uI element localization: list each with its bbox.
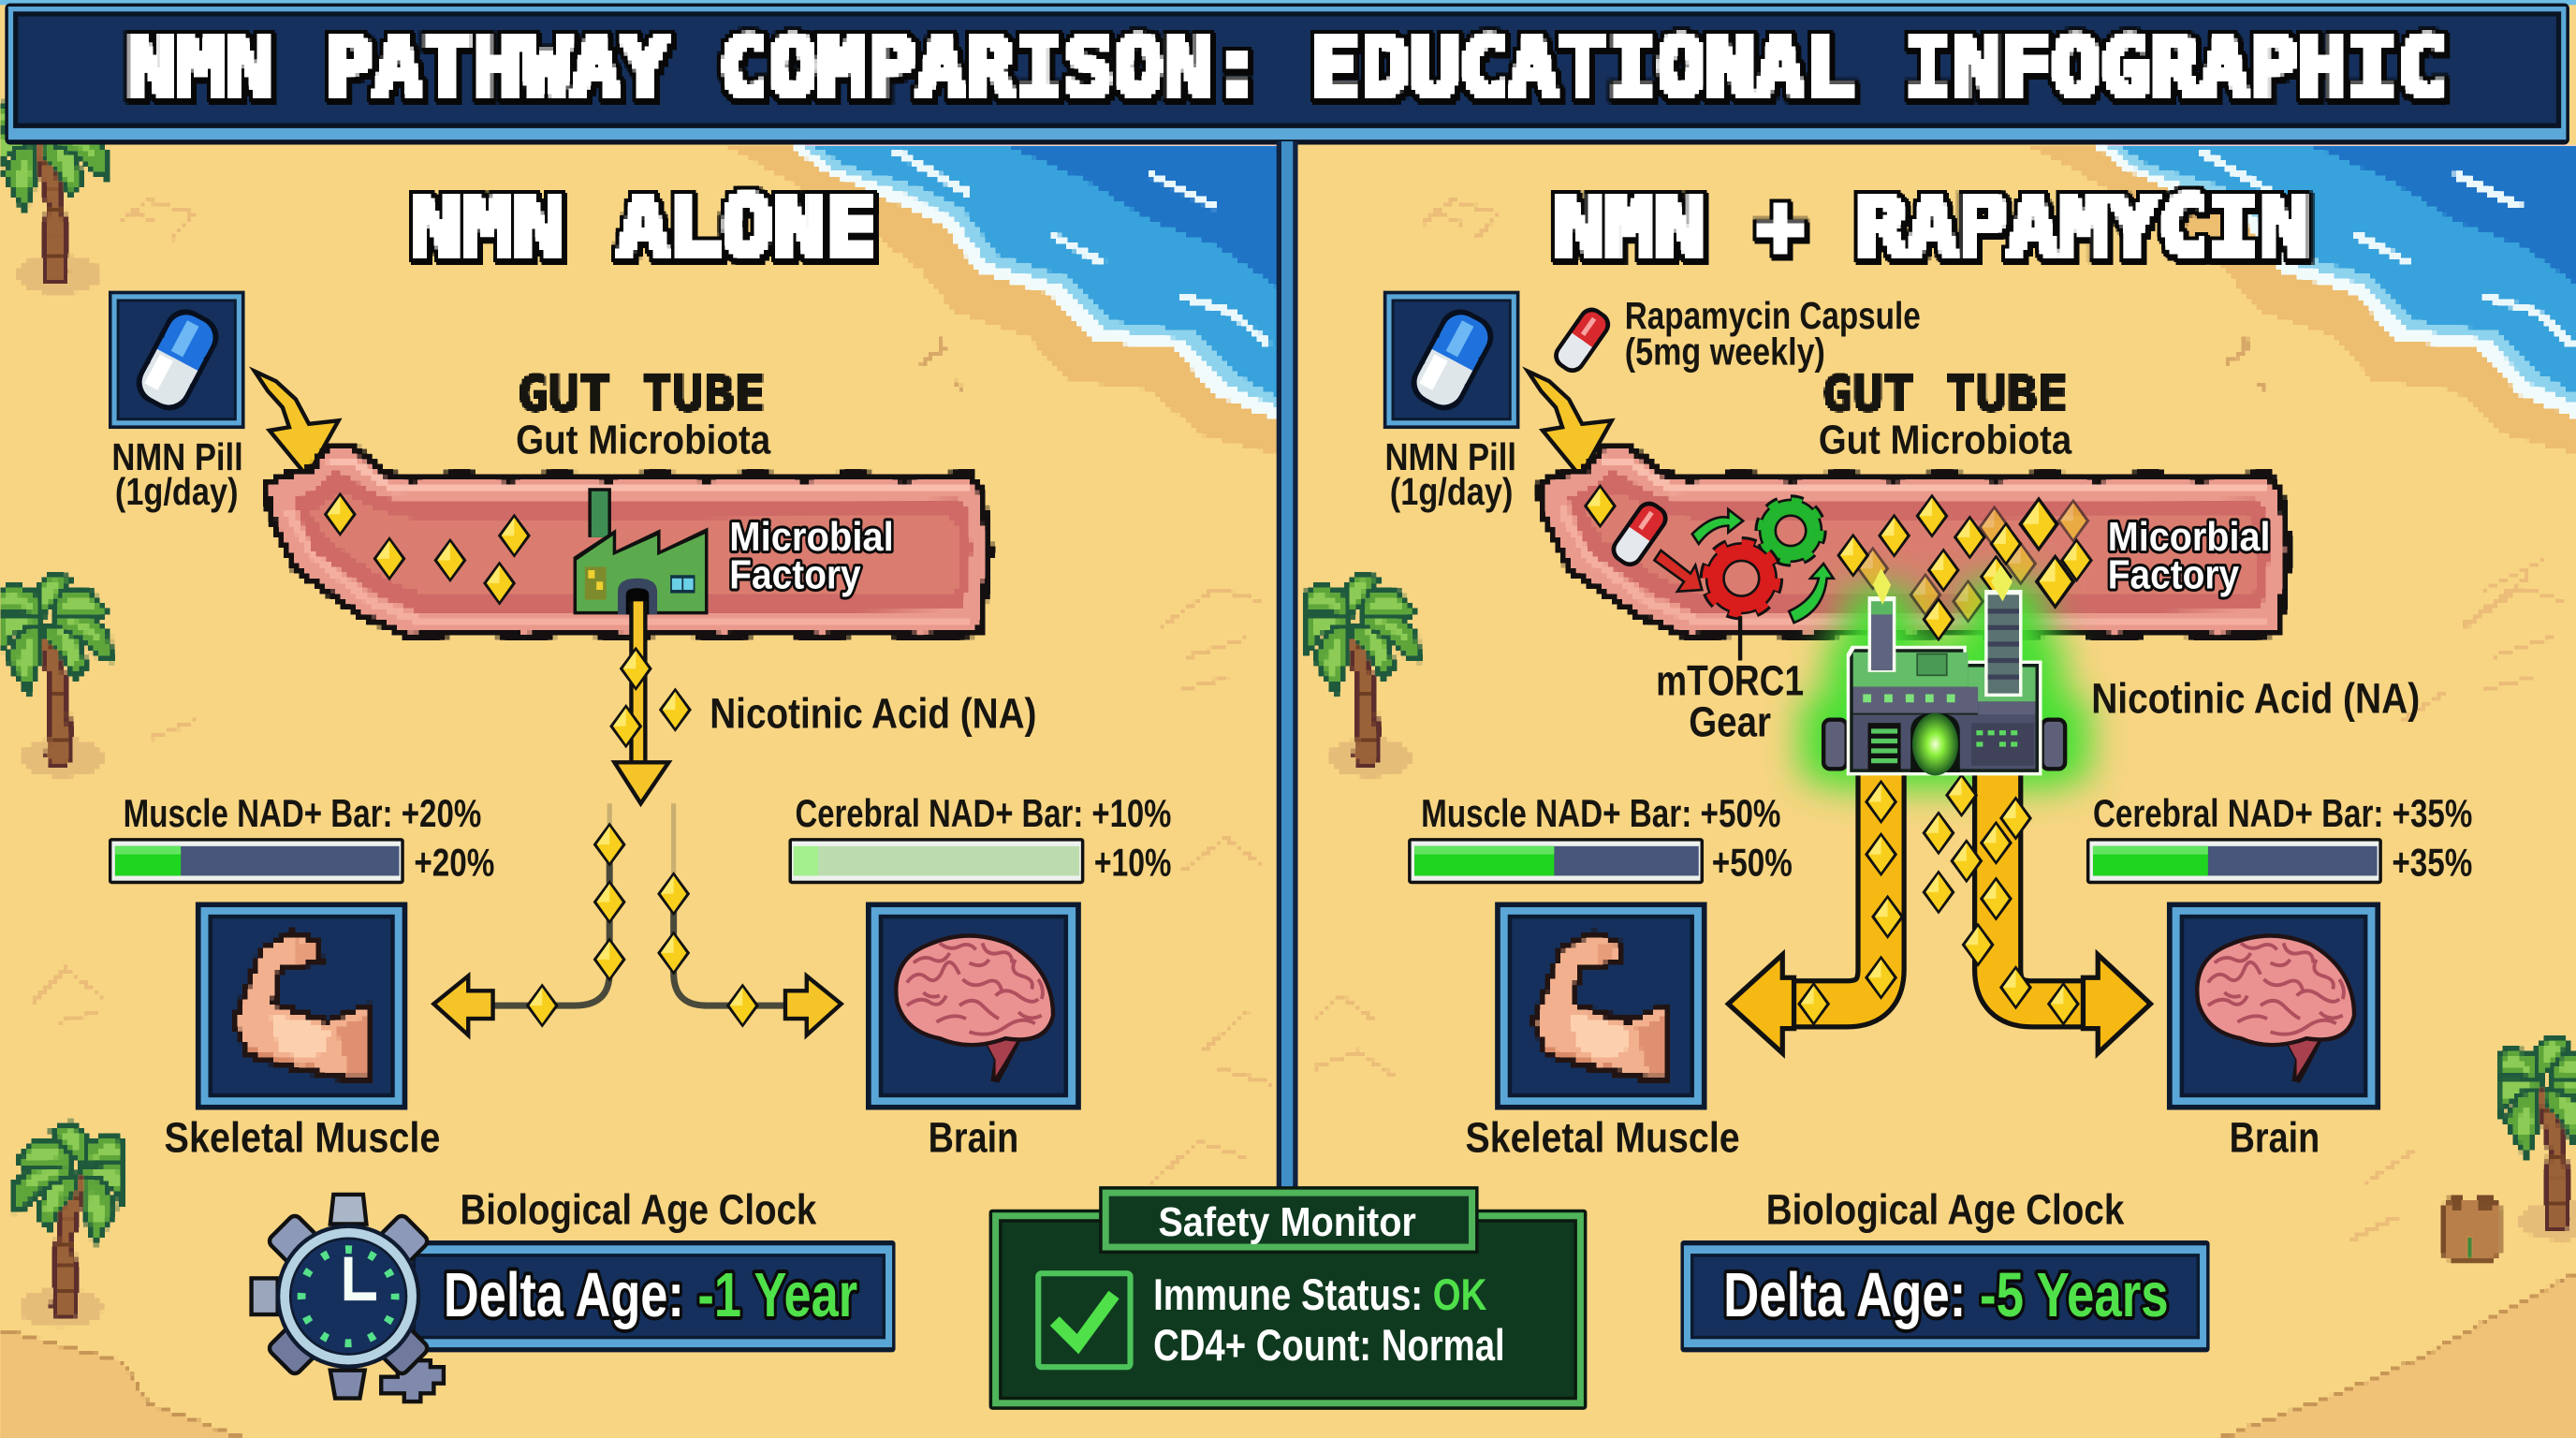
panel: safety monitor xyxy=(989,1186,1587,1410)
delta age panel xyxy=(402,1240,896,1352)
muscle NAD label: Muscle NAD+ Bar: +20% xyxy=(124,791,481,835)
title banner xyxy=(0,0,2576,144)
icon: check box xyxy=(1038,1273,1131,1367)
gut microbiota label: Gut Microbiota xyxy=(516,417,771,462)
mTORC1 leader line xyxy=(1738,616,1742,661)
heading: NMN alone: NMN ALONE xyxy=(409,179,877,274)
icon: mTORC1 red gear xyxy=(1707,544,1776,613)
skeletal muscle label: Skeletal Muscle xyxy=(1466,1113,1740,1161)
floating diamonds xyxy=(1922,773,1983,915)
cerebral NAD label: Cerebral NAD+ Bar: +10% xyxy=(795,791,1171,835)
icon: brain xyxy=(2197,935,2354,1083)
icon: glowing factory xyxy=(1823,565,2065,775)
icon: muscle xyxy=(1531,930,1671,1081)
icon: biological clock xyxy=(252,1195,444,1401)
NMN pill label xyxy=(111,435,243,513)
palm middle right panel xyxy=(1308,574,1418,776)
arrow: pill into gut xyxy=(1528,372,1612,477)
delta age value: Delta Age: -5 Years xyxy=(1723,1261,2169,1330)
icon: microbial factory xyxy=(574,488,708,614)
large pipeline left xyxy=(1728,772,1904,1053)
muscle NAD value: +20% xyxy=(414,840,494,884)
brain box xyxy=(866,902,1081,1110)
microbial factory label: Microbial xyxy=(729,514,894,560)
large pipeline right xyxy=(1962,772,2150,1053)
muscle NAD bar xyxy=(1408,838,1704,884)
biological age clock label: Biological Age Clock xyxy=(460,1185,817,1233)
icon: rapamycin capsule xyxy=(1549,302,1616,378)
large factory glow xyxy=(1801,581,2089,788)
sand dune bottom right xyxy=(2217,1273,2576,1438)
brain label: Brain xyxy=(2230,1113,2320,1161)
right beach and ocean xyxy=(1423,146,2576,690)
mTORC1 gear label: Gear xyxy=(1689,697,1771,745)
palm middle left xyxy=(0,574,110,776)
microbial factory label xyxy=(729,514,894,597)
tube diamonds xyxy=(324,492,531,606)
mTORC1 gear label: mTORC1 xyxy=(1656,656,1804,704)
palm bottom left xyxy=(13,1123,124,1327)
delta age value: Delta Age: -1 Year xyxy=(444,1261,857,1330)
microbial factory label: Micorbial xyxy=(2108,514,2271,560)
brain box xyxy=(2167,902,2380,1110)
cerebral NAD value: +35% xyxy=(2392,840,2472,884)
skeletal muscle box xyxy=(1495,902,1707,1110)
safety monitor tab xyxy=(1099,1186,1479,1254)
arrow: pill into gut xyxy=(255,372,339,477)
left beach and ocean xyxy=(118,146,1278,690)
NMN pill label: (1g/day) xyxy=(1390,470,1513,513)
icon: NMN pill xyxy=(129,301,226,418)
gut tube title: GUT TUBE xyxy=(1822,366,2069,423)
cerebral NAD value: +10% xyxy=(1094,840,1171,884)
palm top left xyxy=(0,91,107,293)
icon: muscle xyxy=(232,930,372,1081)
NMN pill label: NMN Pill xyxy=(111,435,243,478)
branching pathway right xyxy=(657,803,842,1035)
skeletal muscle box xyxy=(196,902,407,1110)
beach stump xyxy=(2445,1195,2498,1258)
delta age panel xyxy=(1680,1240,2210,1352)
muscle NAD label: Muscle NAD+ Bar: +50% xyxy=(1421,791,1781,835)
skeletal muscle label: Skeletal Muscle xyxy=(165,1113,440,1161)
arrows around gears xyxy=(1654,509,1834,623)
muscle NAD bar xyxy=(109,838,404,884)
title text: NMN PATHWAY COMPARISON: EDUCATIONAL INFOGRAPHIC xyxy=(126,20,2446,115)
rapamycin capsule label: (5mg weekly) xyxy=(1625,330,1825,374)
nicotinic acid diamonds xyxy=(609,647,692,748)
NMN pill label: (1g/day) xyxy=(115,470,239,513)
nicotinic acid label: Nicotinic Acid (NA) xyxy=(2091,675,2420,723)
microbial factory label xyxy=(2108,514,2271,597)
palm far right xyxy=(2498,1036,2576,1240)
sand marks xyxy=(33,559,2546,1240)
NMN pill label xyxy=(1385,435,1516,513)
sand dune bottom left xyxy=(0,1329,246,1438)
NMN pill label: NMN Pill xyxy=(1385,435,1516,478)
NMN pill box xyxy=(1383,291,1519,429)
nicotinic acid label: Nicotinic Acid (NA) xyxy=(710,689,1036,737)
CD4 count text: CD4+ Count: Normal xyxy=(1153,1321,1505,1371)
cerebral NAD bar xyxy=(2086,838,2382,884)
gut tube xyxy=(266,447,989,636)
muscle NAD value: +50% xyxy=(1712,840,1793,884)
microbial factory label: Factory xyxy=(729,551,861,597)
icon: NMN pill xyxy=(1404,301,1500,418)
cerebral NAD bar xyxy=(788,838,1084,884)
gut microbiota label: Gut Microbiota xyxy=(1819,417,2072,462)
tube diamonds xyxy=(1584,484,2093,641)
branching pathway left xyxy=(433,803,626,1035)
microbial factory label: Factory xyxy=(2108,551,2240,597)
rapamycin capsule label: Rapamycin Capsule xyxy=(1625,294,1921,337)
center divider xyxy=(1277,141,1298,1212)
gut tube xyxy=(1540,447,2289,636)
gut tube title: GUT TUBE xyxy=(518,366,766,423)
safety monitor title: Safety Monitor xyxy=(1158,1199,1416,1245)
heading: NMN plus rapamycin: NMN + RAPAMYCIN xyxy=(1554,179,2310,274)
rapamycin capsule label xyxy=(1625,294,1921,374)
arrow: nicotinic acid down xyxy=(614,601,668,803)
biological age clock label: Biological Age Clock xyxy=(1766,1185,2125,1233)
brain label: Brain xyxy=(929,1113,1018,1161)
cerebral NAD label: Cerebral NAD+ Bar: +35% xyxy=(2093,791,2472,835)
icon: brain xyxy=(896,935,1053,1083)
mTORC1 gear label xyxy=(1656,656,1804,745)
NMN pill box xyxy=(109,291,245,429)
rapamycin capsule in gut xyxy=(1606,496,1673,572)
panel: NMN alone xyxy=(109,179,1171,1401)
panel: NMN plus rapamycin xyxy=(1383,179,2472,1352)
immune status text: Immune Status: OK xyxy=(1153,1270,1486,1320)
icon: green gear xyxy=(1761,501,1821,560)
